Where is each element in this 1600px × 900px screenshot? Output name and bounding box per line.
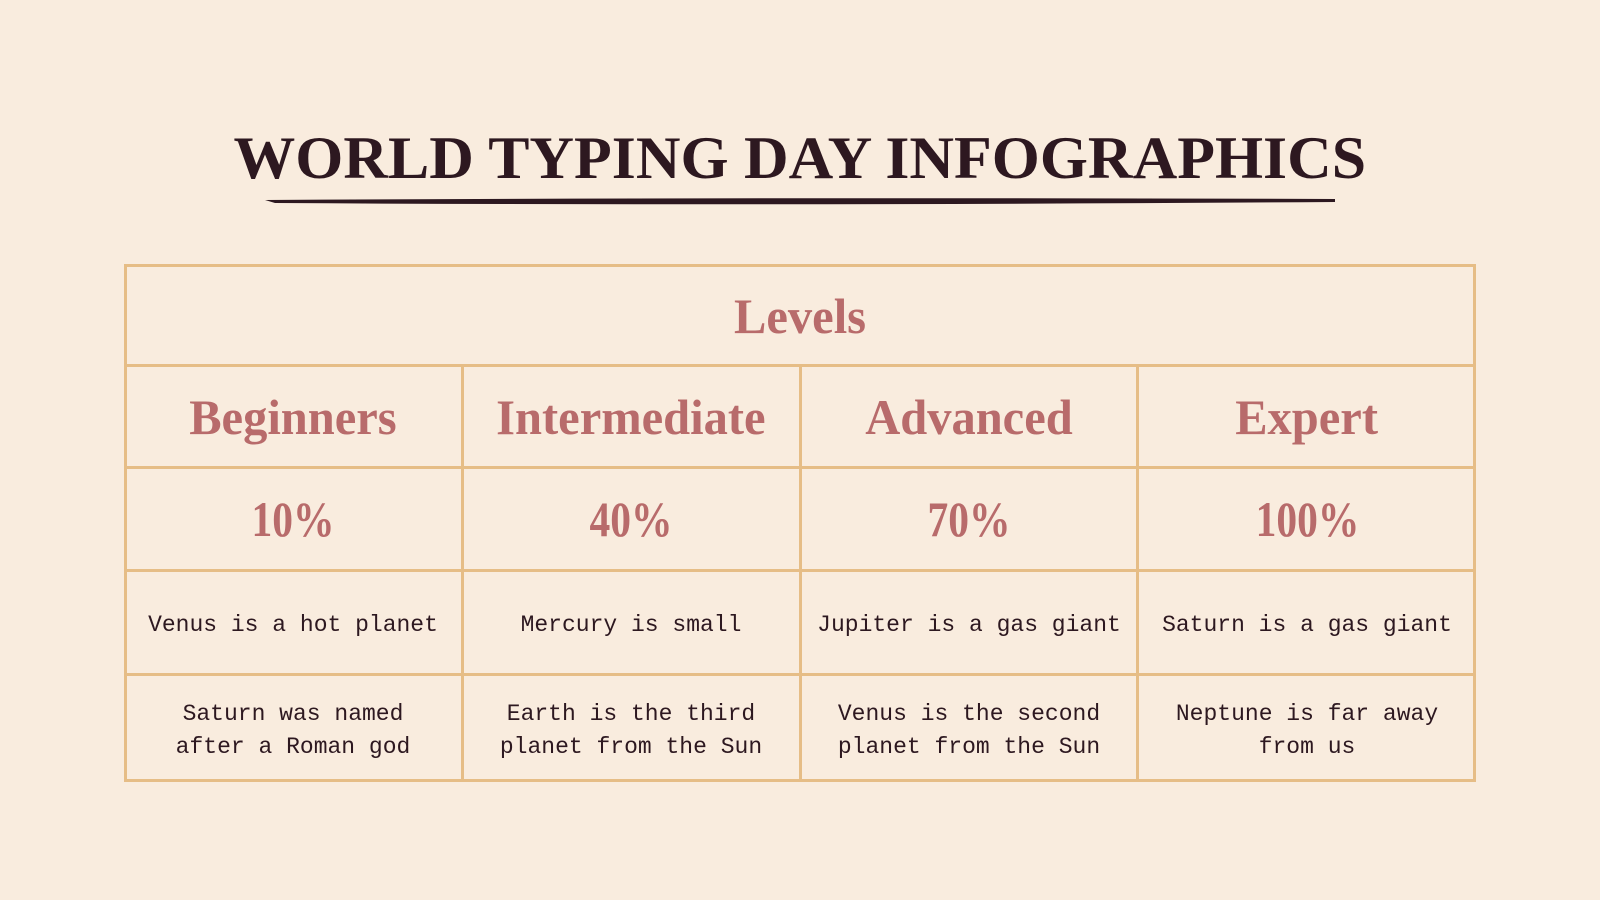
text row 2 col 1: Saturn was named [183, 700, 403, 726]
text row 2 col 2: planet from the Sun [500, 734, 762, 760]
text row 2 col 1 [176, 700, 410, 760]
percent 40%: 40% [590, 491, 672, 547]
header: Intermediate: Intermediate [496, 388, 766, 444]
title underline brush stroke [265, 198, 1335, 204]
header: Expert: Expert [1236, 388, 1378, 444]
text row 2 col 2: Earth is the third [507, 700, 755, 726]
text row 2 col 4: from us [1259, 734, 1355, 760]
header: Advanced: Advanced [865, 388, 1073, 444]
header: Levels: Levels [734, 288, 866, 344]
percent 100%: 100% [1255, 491, 1359, 547]
table: levels [124, 264, 1476, 782]
text row 2 col 3 [838, 700, 1100, 760]
text row 2 col 4: Neptune is far away [1176, 700, 1438, 726]
text row 2 col 1: after a Roman god [176, 734, 410, 760]
text row 1 col 4: Saturn is a gas giant [1162, 612, 1452, 638]
text row 1 col 3: Jupiter is a gas giant [817, 612, 1121, 638]
text row 2 col 4 [1176, 700, 1438, 760]
title: WORLD TYPING DAY INFOGRAPHICS [234, 125, 1366, 191]
text row 2 col 3: Venus is the second [838, 700, 1100, 726]
percent 10%: 10% [252, 491, 334, 547]
text row 2 col 2 [500, 700, 762, 760]
text row 2 col 3: planet from the Sun [838, 734, 1100, 760]
text row 1 col 1: Venus is a hot planet [148, 612, 438, 638]
text row 1 col 2: Mercury is small [521, 612, 741, 638]
header: Beginners: Beginners [189, 388, 397, 444]
percent 70%: 70% [928, 491, 1010, 547]
